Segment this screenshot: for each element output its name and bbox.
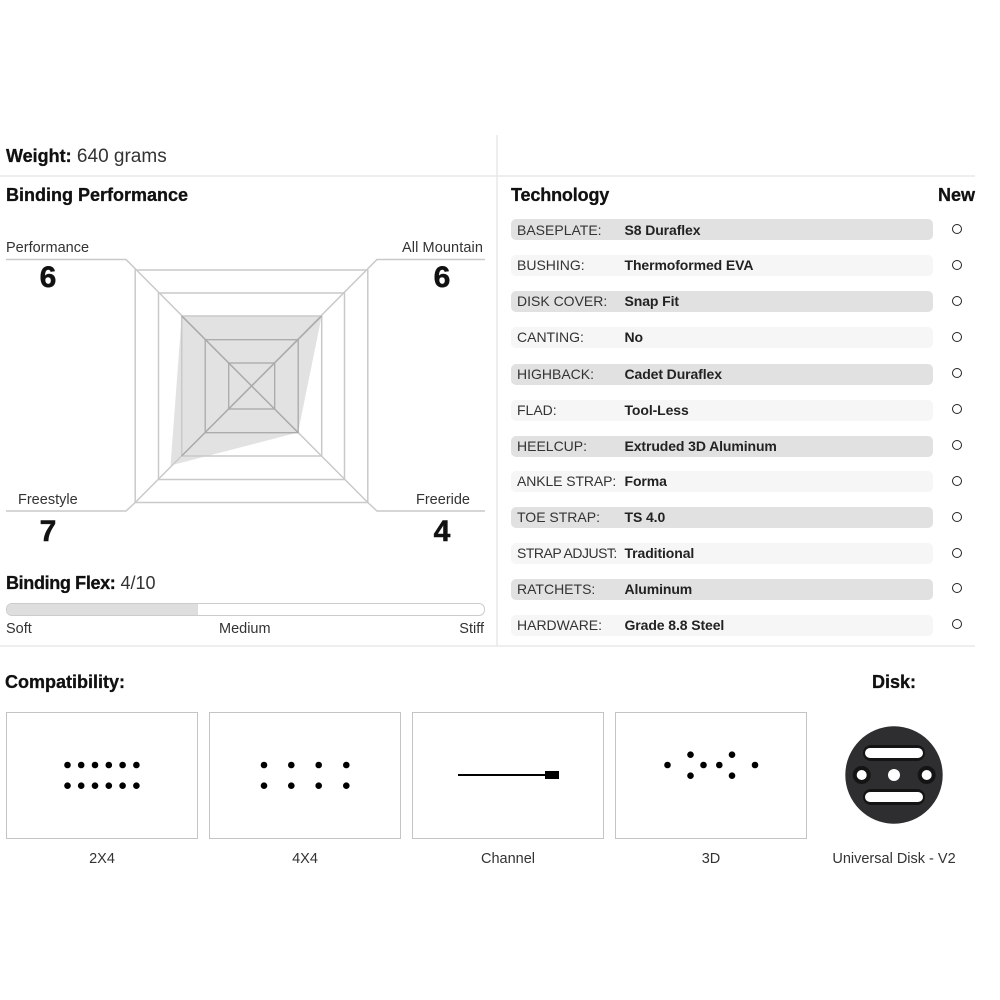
radar value: all mountain: 6	[434, 261, 450, 294]
flex bar	[6, 603, 485, 616]
heading: compatibility: Compatibility:	[5, 672, 125, 692]
flex label: medium: Medium	[219, 621, 271, 637]
technology row: highback: Cadet Duraflex	[624, 366, 722, 382]
technology row: hardware	[511, 614, 933, 636]
caption: 4x4: 4X4	[292, 851, 318, 867]
technology row: ratchets	[511, 578, 933, 600]
technology row: strap adjust	[511, 543, 933, 564]
technology row: strap adjust: Traditional	[624, 545, 694, 561]
caption: 3d: 3D	[702, 851, 720, 867]
technology row: flad	[511, 400, 933, 420]
flex bar fill	[7, 604, 198, 615]
technology row: disk cover: DISK COVER:	[517, 293, 607, 309]
new marker	[952, 583, 962, 593]
pattern: 3d dots	[664, 751, 758, 779]
icon: universal disk	[845, 726, 943, 824]
mounting patterns	[64, 726, 943, 824]
radar label: freestyle: Freestyle	[18, 492, 78, 508]
technology row: disk cover: Snap Fit	[624, 293, 679, 309]
caption: universal disk: Universal Disk - V2	[832, 851, 956, 867]
technology row: baseplate: BASEPLATE:	[517, 222, 602, 238]
technology row: heelcup: HEELCUP:	[517, 438, 587, 454]
caption: channel: Channel	[481, 851, 535, 867]
radar value: freestyle: 7	[40, 514, 56, 548]
radar value: freeride: 4	[434, 514, 450, 548]
radar grid	[6, 260, 485, 511]
technology row: ratchets: Aluminum	[624, 580, 692, 596]
new marker	[952, 512, 962, 522]
technology row: baseplate	[511, 219, 933, 240]
new marker	[952, 476, 962, 486]
technology row: flad: Tool-Less	[624, 402, 689, 418]
technology row: toe strap: TOE STRAP:	[517, 509, 600, 525]
weight heading: Weight: 640 grams	[6, 146, 167, 167]
new marker	[952, 296, 962, 306]
technology row: ankle strap	[511, 471, 933, 492]
radar value: performance: 6	[40, 261, 56, 294]
compatibility box: 4x4	[209, 712, 401, 839]
new marker	[952, 619, 962, 629]
caption: 2x4: 2X4	[89, 851, 115, 867]
technology row: disk cover	[511, 291, 933, 312]
technology row: toe strap	[511, 507, 933, 528]
heading: disk: Disk:	[872, 672, 916, 692]
technology row: bushing: BUSHING:	[517, 257, 585, 273]
compatibility box: 2x4	[6, 712, 198, 839]
heading: binding performance: Binding Performance	[6, 185, 188, 205]
radar label: freeride: Freeride	[416, 492, 470, 508]
new marker	[952, 224, 962, 234]
technology row: toe strap: TS 4.0	[624, 509, 665, 525]
pattern: 4x4 dots	[261, 762, 350, 789]
technology row: highback	[511, 364, 933, 384]
technology row: hardware: Grade 8.8 Steel	[624, 616, 724, 632]
technology row: highback: HIGHBACK:	[517, 366, 594, 382]
radar chart	[6, 258, 485, 512]
technology row: ankle strap: ANKLE STRAP:	[517, 473, 616, 489]
technology row: flad: FLAD:	[517, 402, 557, 418]
technology row: strap adjust: STRAP ADJUST:	[517, 545, 617, 561]
flex label: soft: Soft	[6, 621, 32, 637]
new marker	[952, 368, 962, 378]
technology row: canting	[511, 327, 933, 348]
technology row: bushing: Thermoformed EVA	[624, 257, 753, 273]
technology row: heelcup: Extruded 3D Aluminum	[624, 438, 777, 454]
technology row: heelcup	[511, 436, 933, 456]
binding flex heading: Binding Flex: 4/10	[6, 573, 156, 593]
compatibility box: channel	[412, 712, 604, 839]
radar label: performance: Performance	[6, 240, 89, 256]
technology row: canting: CANTING:	[517, 329, 584, 345]
radar label: all mountain: All Mountain	[402, 240, 483, 256]
heading: new: New	[938, 185, 975, 205]
data polygon	[170, 316, 322, 466]
new marker	[952, 404, 962, 414]
technology row: bushing	[511, 255, 933, 276]
pattern: channel	[458, 771, 559, 779]
pattern: 2x4 dots	[64, 762, 140, 789]
radar inner grid	[182, 316, 322, 456]
technology row: baseplate: S8 Duraflex	[624, 222, 700, 238]
compatibility box: 3d	[615, 712, 807, 839]
technology row: hardware: HARDWARE:	[517, 616, 602, 632]
new marker	[952, 548, 962, 558]
flex label: stiff: Stiff	[459, 621, 484, 637]
technology row: ankle strap: Forma	[624, 473, 667, 489]
new marker	[952, 260, 962, 270]
new marker	[952, 332, 962, 342]
new marker	[952, 440, 962, 450]
heading: technology: Technology	[511, 185, 609, 205]
technology row: canting: No	[624, 329, 643, 345]
technology row: ratchets: RATCHETS:	[517, 580, 595, 596]
